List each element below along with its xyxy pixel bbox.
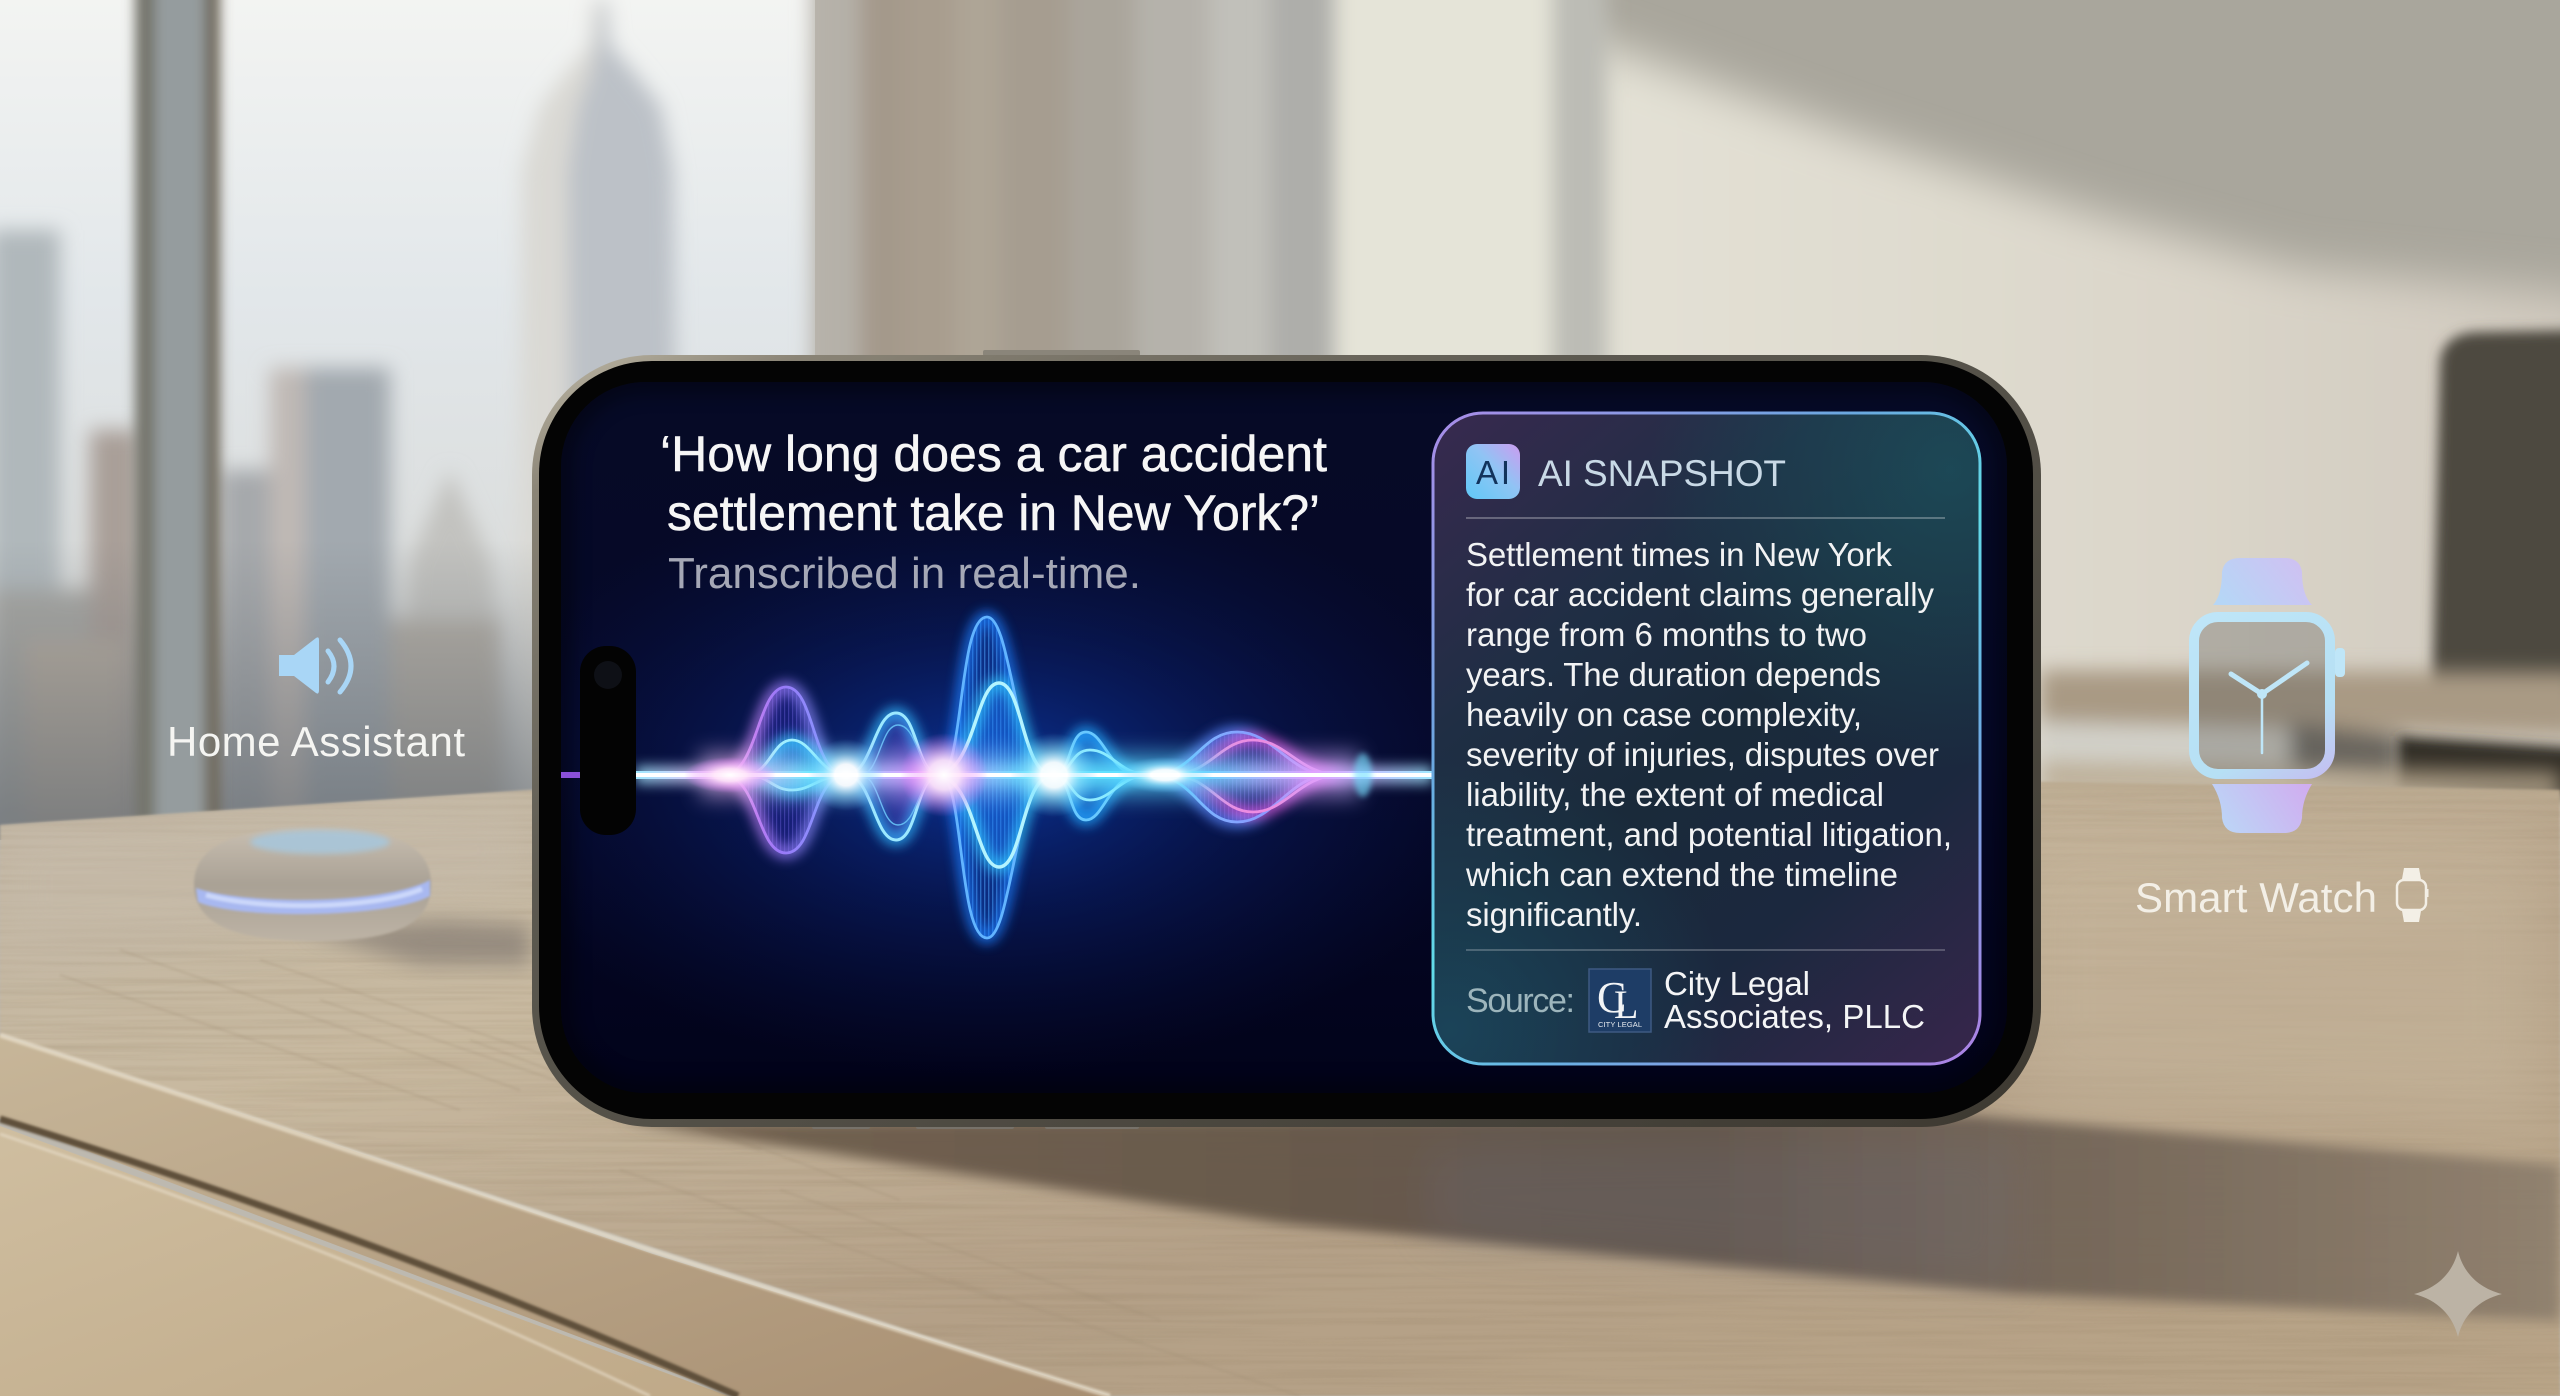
home assistant smart speaker xyxy=(194,828,431,941)
top side button xyxy=(983,350,1140,356)
skyline buildings xyxy=(0,230,520,840)
window frame xyxy=(135,0,220,850)
wave lobe fills xyxy=(723,617,1330,938)
icon: smart watch xyxy=(2194,558,2345,833)
icon: ai badge xyxy=(1466,444,1520,499)
icon: city legal logo: L xyxy=(1614,982,1638,1027)
background chair and shelf xyxy=(2040,330,2560,798)
phone screen reflection on table xyxy=(1427,1140,2015,1290)
panel body text: significantly. xyxy=(1466,896,1642,933)
icon: city legal logo xyxy=(1589,969,1651,1032)
panel body text: which can extend the timeline xyxy=(1465,856,1898,893)
spoken question headline: ‘How long does a car accident xyxy=(660,426,1327,482)
panel body text: range from 6 months to two xyxy=(1466,616,1867,653)
source name xyxy=(1664,965,1925,1035)
panel body text: Settlement times in New York xyxy=(1466,536,1892,573)
table front edge xyxy=(0,1035,1110,1396)
speaker shadow xyxy=(300,920,530,965)
icon: small watch xyxy=(2397,868,2428,922)
wave glow xyxy=(723,617,1340,938)
empire state building xyxy=(518,0,680,820)
panel body text: treatment, and potential litigation, xyxy=(1466,816,1952,853)
source label: Source: xyxy=(1466,982,1575,1020)
panel body text: heavily on case complexity, xyxy=(1466,696,1862,733)
panel body text: liability, the extent of medical xyxy=(1466,776,1884,813)
spoken question headline: settlement take in New York?’ xyxy=(667,485,1320,541)
transcribed caption: Transcribed in real-time. xyxy=(668,549,1141,598)
source name: Associates, PLLC xyxy=(1664,998,1925,1035)
panel body text: years. The duration depends xyxy=(1466,656,1881,693)
panel body text: severity of injuries, disputes over xyxy=(1466,736,1939,773)
phone shadow on table xyxy=(620,1116,2560,1321)
icon: speaker xyxy=(279,637,351,694)
icon: ai badge: AI xyxy=(1476,454,1510,491)
wooden table surface xyxy=(0,760,2560,1396)
phone xyxy=(465,350,2041,1129)
source name: City Legal xyxy=(1664,965,1810,1002)
icon: sparkle watermark xyxy=(2414,1251,2502,1337)
panel heading: AI SNAPSHOT xyxy=(1538,453,1786,494)
label: home assistant: Home Assistant xyxy=(167,718,465,765)
diagonal wood grain xyxy=(65,976,66,977)
window dimming xyxy=(0,540,815,840)
wave bright nodes xyxy=(684,733,1372,817)
label: smart watch: Smart Watch xyxy=(2135,874,2377,921)
phone screen xyxy=(465,382,2007,1093)
voice waveform xyxy=(561,617,1432,938)
icon: city legal logo: C xyxy=(1597,973,1626,1022)
wall with light patches xyxy=(1270,0,2560,860)
window sky xyxy=(0,0,815,850)
camera notch xyxy=(580,646,636,835)
center beam xyxy=(700,752,1360,798)
panel body text xyxy=(1465,536,1952,933)
soft back edge right xyxy=(2041,762,2560,800)
phone frame xyxy=(532,355,2041,1127)
icon: city legal logo: CITY LEGAL xyxy=(1598,1020,1642,1029)
bottom side buttons xyxy=(812,1124,1139,1129)
panel body text: for car accident claims generally xyxy=(1466,576,1934,613)
spoken question headline xyxy=(660,426,1327,541)
curtain xyxy=(812,0,1300,850)
panel: ai snapshot xyxy=(1433,413,1980,1064)
wave strokes xyxy=(723,617,1340,938)
